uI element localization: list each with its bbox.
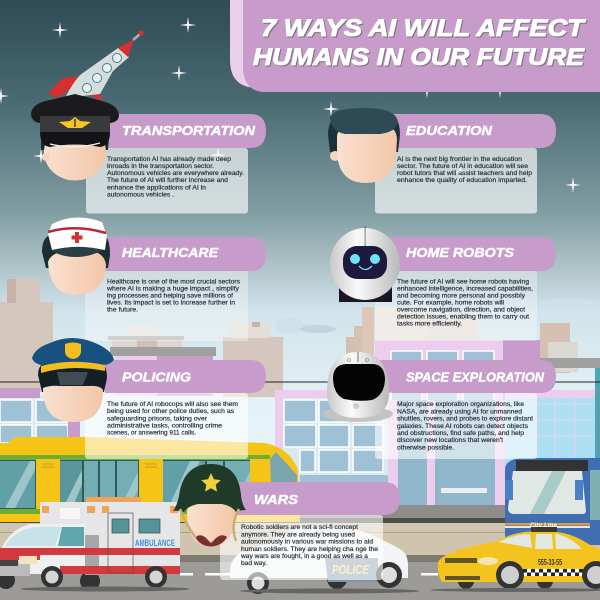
body text: transportation: Transportation AI has already made deep bbox=[107, 156, 232, 163]
panel: space exploration bbox=[375, 360, 556, 459]
body text: wars: bad way. bbox=[241, 560, 267, 567]
body text: policing: The future of AI robocops will also see them bbox=[107, 401, 238, 408]
icon: soldier head bbox=[173, 464, 246, 546]
body text: policing: scenes, or answering 911 calls. bbox=[107, 430, 196, 436]
body text: home robots: overcome navigation, direction, and object bbox=[397, 306, 525, 314]
body text: healthcare bbox=[106, 278, 240, 314]
panel: policing: POLICING bbox=[122, 370, 191, 384]
body text: education: enhance the quality of education imparted. bbox=[397, 177, 527, 184]
body text: wars bbox=[240, 524, 379, 567]
icon: nurse head bbox=[42, 217, 110, 295]
panel: transportation bbox=[86, 114, 266, 214]
body text: home robots: detection issues, enabling them to carry out bbox=[397, 314, 529, 320]
body text: home robots bbox=[397, 278, 533, 328]
body text: education: AI is the next big frontier in the education bbox=[397, 156, 522, 163]
body text: space exploration: discover new locations that weren't bbox=[397, 437, 503, 444]
body text: healthcare: where AI is making a huge impact , simplify bbox=[106, 286, 240, 292]
body text: home robots: and becoming more personal and possibly bbox=[397, 292, 526, 300]
panel: wars bbox=[220, 482, 400, 580]
panel: home robots bbox=[375, 237, 556, 341]
icon: astronaut helmet bbox=[323, 352, 393, 422]
panel: wars: WARS bbox=[254, 492, 298, 507]
body text: policing: being used for other police duties, such as bbox=[107, 408, 234, 415]
city background bbox=[0, 279, 600, 600]
body text: transportation: The future of AI will further increase and bbox=[107, 177, 228, 184]
body text: policing: administrative tasks, controlling crime bbox=[107, 422, 223, 430]
panel: healthcare bbox=[85, 237, 266, 341]
body text: transportation bbox=[107, 156, 244, 198]
title panel bbox=[230, 0, 600, 92]
panel: home robots: HOME ROBOTS bbox=[406, 245, 514, 260]
body text: space exploration: otherwise possible. bbox=[397, 444, 454, 452]
body text: transportation: enhance the applications of AI in bbox=[107, 184, 206, 192]
icon: pilot head bbox=[31, 94, 119, 180]
body text: wars: way wars are fought, in a good as well as a bbox=[240, 553, 369, 560]
body text: healthcare: lives. Its impact is set to increase further in bbox=[107, 300, 235, 306]
body text: healthcare: ing processes and helping save millions of bbox=[107, 292, 233, 300]
body text: space exploration: Major space exploration organizations, like bbox=[397, 401, 525, 408]
police car: POLICE bbox=[332, 562, 369, 577]
body text: wars: autonomously in various war missions to aid bbox=[241, 538, 373, 546]
city bus bbox=[505, 458, 600, 545]
ambulance: AMBULANCE bbox=[135, 538, 175, 548]
body text: home robots: tasks more efficiently. bbox=[397, 320, 462, 328]
tram bus bbox=[0, 437, 300, 522]
body text: policing: safeguarding prisons, taking over bbox=[107, 416, 207, 422]
body text: wars: anymore. They are already being used bbox=[241, 532, 355, 538]
panel: healthcare: HEALTHCARE bbox=[122, 245, 218, 260]
body text: home robots: enhanced intelligence, increased capabilities, bbox=[397, 286, 533, 292]
taxi: 555-33-55 bbox=[538, 558, 562, 567]
body text: home robots: cute. For example, home robots will bbox=[397, 300, 504, 306]
panel: policing bbox=[85, 360, 266, 459]
title: HUMANS IN OUR FUTURE bbox=[253, 44, 585, 71]
body text: education: sector. The future of AI in education will see bbox=[397, 163, 529, 170]
stars bbox=[0, 17, 581, 193]
icon: robot head bbox=[330, 226, 400, 302]
icon: police head bbox=[32, 338, 114, 422]
body text: space exploration: and obstructions, find safe paths, and help bbox=[397, 430, 525, 437]
body text: policing bbox=[107, 401, 238, 436]
panel: education: EDUCATION bbox=[406, 123, 493, 138]
police car bbox=[230, 528, 420, 594]
body text: wars: Robotic soldiers are not a sci-fi concept bbox=[241, 524, 358, 531]
body text: transportation: autonomous vehicles . bbox=[107, 192, 174, 198]
panel: transportation: TRANSPORTATION bbox=[122, 123, 256, 138]
panel: education bbox=[375, 114, 556, 214]
body text: space exploration: shuttles, rovers, and probes to explore distant bbox=[397, 416, 533, 422]
body text: healthcare: Healthcare is one of the most crucial sectors bbox=[107, 278, 240, 286]
body text: space exploration bbox=[397, 401, 533, 452]
body text: wars: human soldiers. They are helping cha nge the bbox=[241, 546, 379, 553]
body text: education: robot tutors that will assist teachers and help bbox=[397, 170, 533, 177]
body text: transportation: inroads in the transportation sector. bbox=[107, 163, 214, 170]
taxi bbox=[430, 527, 600, 592]
rocket bbox=[48, 30, 144, 102]
icon: student head bbox=[328, 108, 400, 183]
body text: home robots: The future of AI will see home robots having bbox=[397, 278, 529, 286]
city bus: City Line bbox=[530, 523, 558, 529]
body text: healthcare: the future. bbox=[107, 306, 138, 314]
body text: space exploration: galaxies. These AI robots can detect objects bbox=[397, 423, 528, 430]
panel: space exploration: SPACE EXPLORATION bbox=[406, 370, 545, 384]
body text: transportation: Autonomous vehicles are everywhere already. bbox=[107, 170, 244, 177]
ambulance bbox=[0, 497, 190, 592]
title: 7 WAYS AI WILL AFFECT bbox=[261, 15, 586, 42]
title bbox=[253, 15, 586, 71]
body text: education bbox=[397, 156, 533, 184]
body text: space exploration: NASA, are already using AI for unmanned bbox=[397, 408, 522, 416]
